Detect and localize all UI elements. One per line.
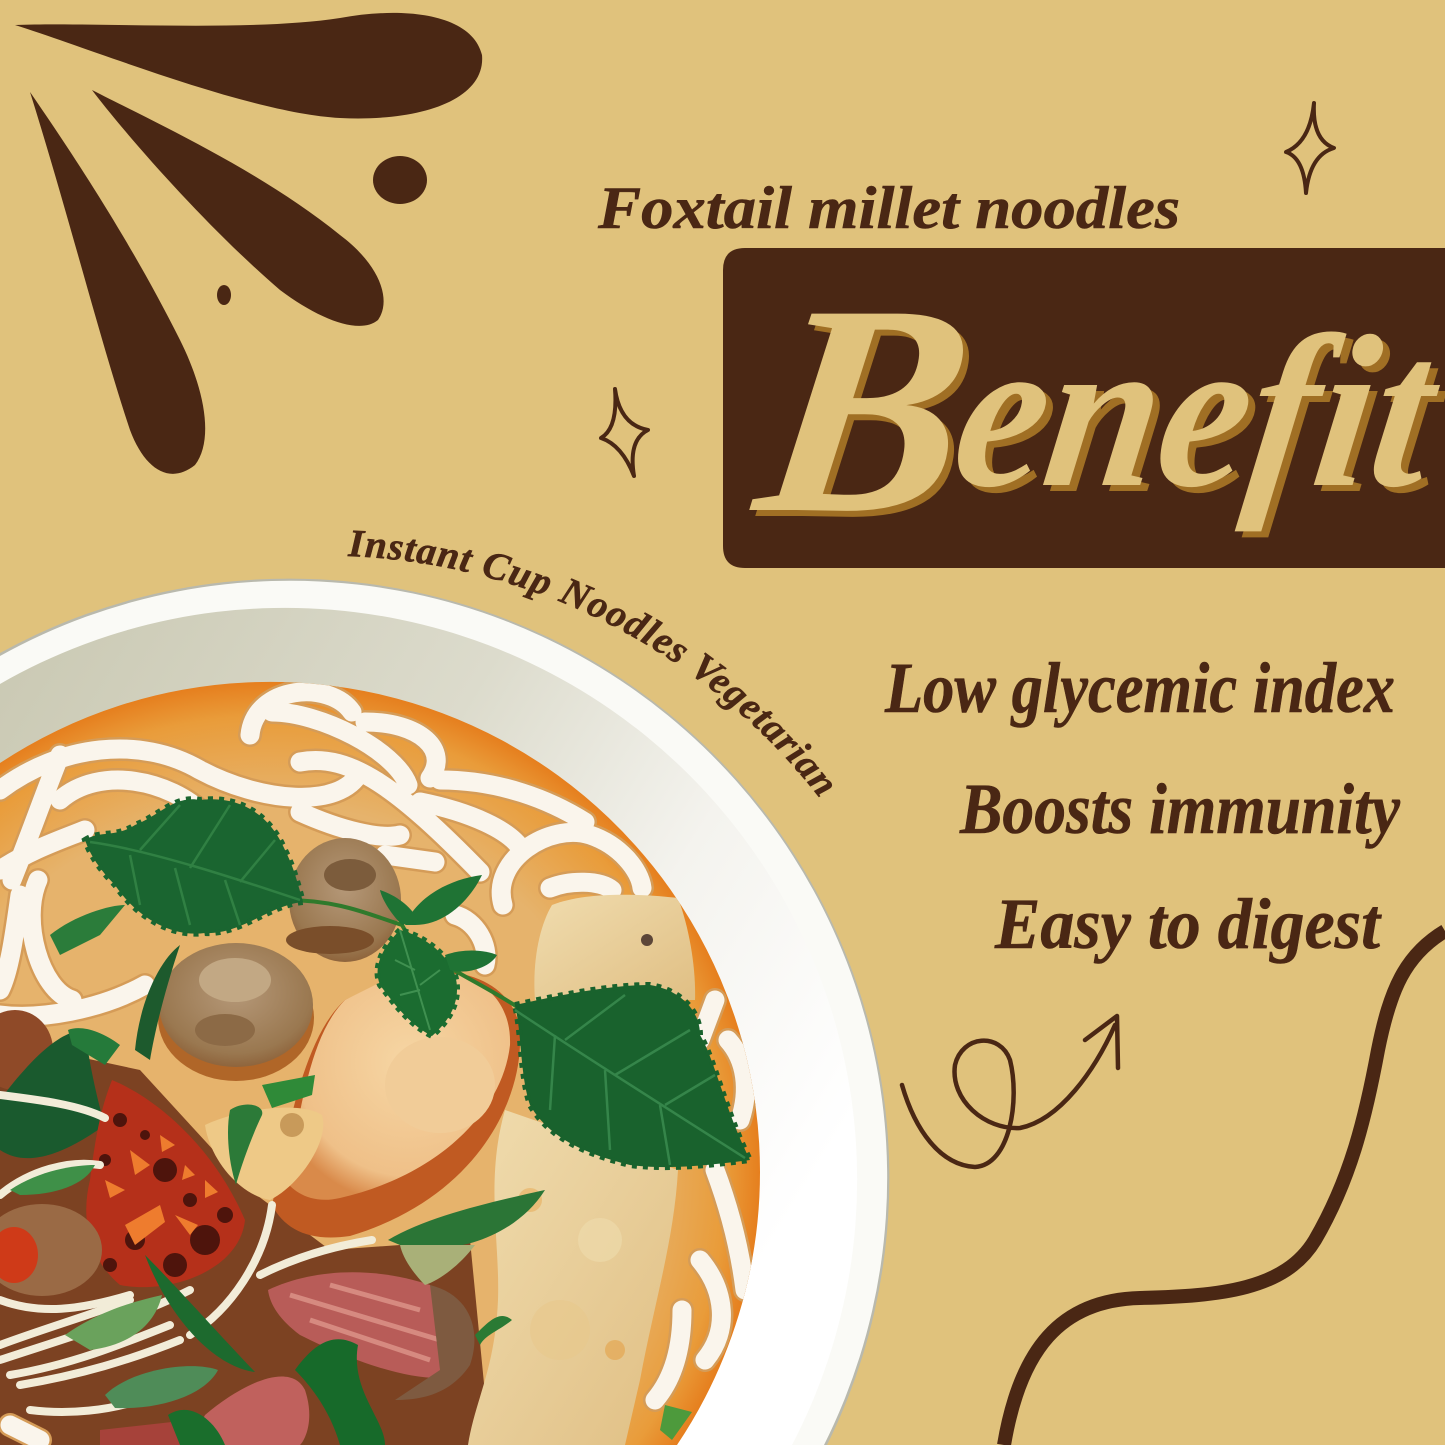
noodle soup (0, 670, 780, 1445)
basil stem (302, 898, 516, 1008)
basil leaf left (85, 799, 303, 934)
curved text: Instant Cup Noodles Vegetarian: Instant Cup Noodles Vegetarian (347, 530, 832, 798)
benefit: easy to digest: Easy to digest (994, 884, 1382, 964)
fish cake (468, 895, 695, 1445)
bowl (0, 579, 889, 1445)
peanut piece (205, 1108, 323, 1200)
icon: sparkle left of banner (601, 389, 648, 476)
left meat (0, 1010, 53, 1090)
benefit: boosts immunity: Boosts immunity (959, 769, 1401, 849)
subtitle: Foxtail millet noodles (597, 175, 1180, 241)
pork (272, 971, 520, 1238)
chilli sauce (86, 1080, 245, 1287)
beef (100, 1272, 474, 1445)
left meat slice (0, 1204, 102, 1296)
noodles (0, 692, 745, 1440)
icon: sparkle top right (1286, 103, 1334, 193)
meatball lower (158, 943, 314, 1081)
meatball upper (286, 838, 401, 962)
green herbs (10, 1075, 692, 1445)
left greens (0, 905, 180, 1158)
basil leaf right (515, 985, 750, 1167)
banner (723, 243, 1445, 582)
heading: Benefit (738, 243, 1445, 582)
onion slices (0, 1095, 372, 1412)
arrow (902, 1016, 1118, 1167)
basil leaves top (380, 875, 497, 972)
heading: Benefit: B (744, 249, 996, 582)
basil leaf small centre (378, 930, 457, 1036)
decorative wave (1004, 931, 1445, 1445)
benefit list (884, 648, 1401, 964)
dark soup under toppings (0, 1040, 490, 1445)
heading: Benefit: B (738, 243, 990, 576)
decorative leaf motif (15, 13, 482, 474)
